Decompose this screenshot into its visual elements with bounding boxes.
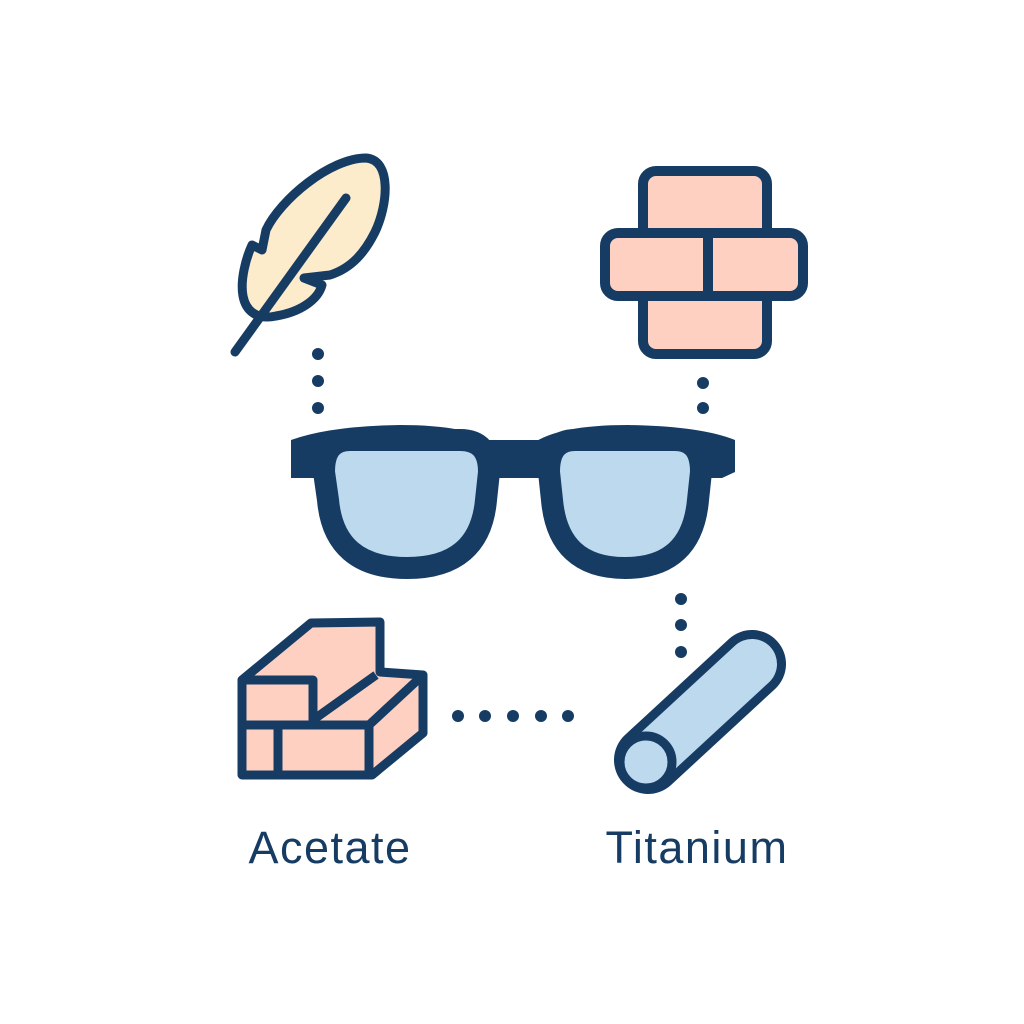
icon: glasses	[291, 425, 735, 568]
icon: feather	[235, 158, 385, 352]
dotted connector: feather to glasses	[312, 348, 324, 414]
dotted connector: glasses to titanium	[675, 593, 687, 658]
dotted connector: brick to glasses	[697, 377, 709, 414]
label: Acetate: Acetate	[248, 822, 412, 873]
icon: brick cross	[605, 171, 803, 354]
label: Titanium: Titanium	[606, 822, 788, 873]
icon: acetate blocks	[242, 622, 423, 775]
dotted connector: acetate to titanium	[452, 710, 574, 722]
icon: titanium rod	[620, 664, 752, 788]
